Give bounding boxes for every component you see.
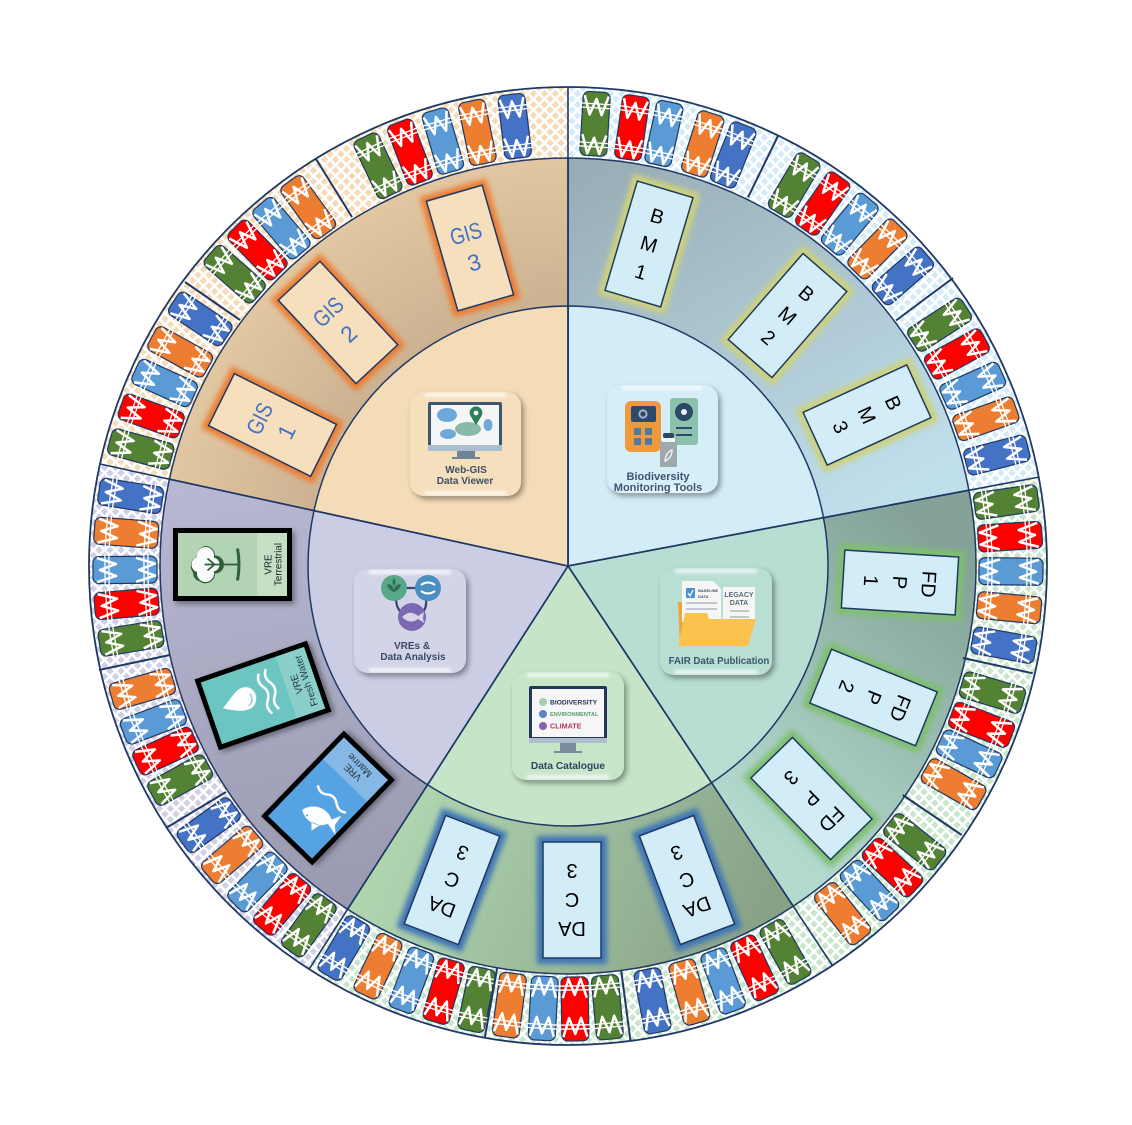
tile label: Web-GIS	[445, 465, 487, 476]
tile label: Data Viewer	[437, 476, 493, 487]
icon: tree	[191, 546, 239, 583]
inner wedge: data catalogue	[428, 566, 712, 826]
panel: biodiversity monitoring sector	[568, 87, 1039, 566]
card: DA C 3 left: DA	[424, 891, 459, 921]
middle ring band: data catalogue	[348, 566, 793, 974]
chip group J	[173, 793, 341, 961]
icon: linked VRE circles	[381, 575, 441, 631]
card: BM 3: M	[853, 403, 880, 428]
tile label: Biodiversity	[627, 471, 690, 483]
inner wedge: VREs	[308, 511, 568, 785]
icon: catalogue monitor: BIODIVERSITY	[550, 700, 598, 706]
card: DA C 3 left	[404, 815, 500, 945]
panel: FAIR data publication sector	[568, 477, 1047, 965]
chip group A	[577, 91, 760, 191]
chip group F	[810, 809, 950, 949]
tile: Web-GIS Data Viewer	[410, 392, 521, 496]
card: GIS 2	[278, 261, 398, 384]
panel: Web-GIS sector	[100, 87, 568, 566]
chip group L	[93, 475, 165, 659]
icon: water drop and waves	[215, 668, 282, 728]
card: GIS 2: GIS	[308, 291, 349, 332]
card: FD P 2	[810, 649, 937, 746]
card: VRE Marine: VRE	[342, 760, 364, 783]
card: DA C 3 left: 3	[454, 840, 472, 864]
card: FD P 3	[751, 737, 872, 860]
tile label: FAIR Data Publication	[669, 656, 769, 667]
card: VRE Fresh Water: Fresh Water	[293, 653, 321, 707]
card: VRE Terrestrial: VRE	[264, 554, 274, 575]
card: DA C 3 right: DA	[679, 891, 714, 922]
inner wedge: FAIR data publication	[568, 518, 828, 783]
card: VRE Fresh Water	[198, 644, 328, 747]
card: BM 2	[728, 253, 847, 378]
icon: catalogue monitor: CLIMATE	[550, 722, 582, 730]
card: VRE Fresh Water: VRE	[289, 672, 306, 695]
card: FD P 2: FD	[884, 692, 915, 724]
card: GIS 1	[209, 374, 336, 476]
card: BM 1	[605, 181, 693, 307]
tile: FAIR Data Publication	[660, 568, 772, 675]
chip group D	[970, 482, 1043, 667]
card: FD P 3: 3	[779, 765, 802, 789]
chip group M	[106, 288, 236, 473]
card: DA C 3 right	[639, 815, 735, 945]
card: FD P 1	[841, 550, 959, 615]
tile label: VREs &	[394, 641, 430, 652]
outer ring band: data catalogue	[309, 566, 832, 1045]
icon: folder with baseline and legacy documents: DATA	[730, 600, 748, 607]
icon: folder with baseline and legacy documents: BASELINE	[698, 588, 719, 593]
card: FD P 1: P	[888, 575, 910, 590]
card: GIS 3: 3	[464, 248, 484, 277]
card: FD P 2: P	[860, 687, 885, 707]
card: DA C 3 right: 3	[667, 840, 685, 864]
outer ring band: Web-GIS	[100, 87, 568, 566]
icon: sensor device	[670, 398, 698, 445]
chip group C	[904, 294, 1032, 479]
icon: catalogue monitor: ENVIRONMENTAL	[550, 712, 599, 718]
card: DA C 3 left: C	[442, 866, 463, 892]
middle ring band: Web-GIS	[169, 158, 568, 566]
card: VRE Marine: Marine	[345, 750, 375, 779]
chip group E	[918, 668, 1028, 814]
card: BM 3: B	[880, 393, 905, 414]
tile: Biodiversity Monitoring Tools	[607, 385, 718, 494]
card: BM 2: B	[794, 282, 818, 307]
card: BM 3: 3	[827, 418, 852, 437]
chip group O	[350, 93, 535, 202]
card: DA C 3 middle: C	[565, 888, 579, 910]
card: FD P 1: 1	[859, 574, 881, 587]
outer ring band: biodiversity monitoring	[568, 87, 1039, 566]
icon: map monitor	[428, 402, 502, 459]
chip group B	[764, 149, 938, 309]
card: FD P 3: P	[798, 785, 823, 810]
icon: folder with baseline and legacy documents: LEGACY	[724, 592, 754, 599]
inner wedge: Web-GIS	[314, 306, 568, 566]
card: DA C 3 middle: 3	[566, 859, 578, 881]
card: GIS 3: GIS	[447, 217, 485, 250]
card: DA C 3 right: C	[676, 866, 697, 892]
card: FD P 1: FD	[916, 570, 940, 598]
chip group K	[107, 665, 216, 810]
panel: VREs and data analysis sector	[89, 464, 568, 969]
icon: folder with baseline and legacy documents: DATA	[698, 594, 709, 599]
card: GIS 1: 1	[272, 420, 301, 443]
icon: sample bottle	[660, 433, 677, 467]
tile: VREs and Data Analysis	[354, 569, 466, 673]
card: BM 2: 2	[756, 326, 779, 350]
icon: fish and wave	[288, 784, 355, 850]
middle ring band: VREs	[160, 479, 568, 909]
chip group H	[489, 971, 626, 1041]
outer ring band: FAIR data publication	[568, 477, 1047, 965]
chip group N	[200, 172, 340, 307]
card: BM 1: M	[638, 232, 660, 258]
card: GIS 2: 2	[335, 320, 362, 348]
outer ring band: VREs	[89, 464, 568, 969]
card: GIS 1: GIS	[241, 398, 278, 439]
card: VRE Marine	[265, 734, 391, 862]
card: VRE Terrestrial	[176, 530, 290, 598]
card: FD P 2: 2	[833, 677, 858, 696]
panel: data catalogue sector	[309, 566, 832, 1045]
card: FD P 3: FD	[814, 801, 848, 836]
middle ring band: biodiversity monitoring	[568, 158, 969, 566]
tile: Data Catalogue	[512, 672, 624, 780]
card: DA C 3 middle: DA	[557, 917, 586, 939]
icon: folder with baseline and legacy documents	[678, 581, 756, 646]
middle ring band: FAIR data publication	[568, 490, 976, 906]
icon: handheld meter	[625, 401, 661, 452]
icon: catalogue monitor	[529, 686, 607, 753]
card: BM 3	[803, 365, 931, 465]
card: GIS 3	[426, 185, 514, 311]
card: BM 1: 1	[632, 261, 649, 285]
tile label: Data Analysis	[380, 652, 446, 663]
inner wedge: biodiversity monitoring	[568, 306, 824, 566]
card: DA C 3 middle	[543, 842, 601, 958]
tile label: Data Catalogue	[531, 761, 605, 772]
card: BM 1: B	[647, 205, 666, 230]
chip group I	[314, 912, 499, 1034]
card: BM 2: M	[773, 302, 800, 330]
card: VRE Terrestrial: Terrestrial	[274, 543, 284, 586]
chip group G	[631, 916, 815, 1035]
tile label: Monitoring Tools	[614, 482, 702, 494]
